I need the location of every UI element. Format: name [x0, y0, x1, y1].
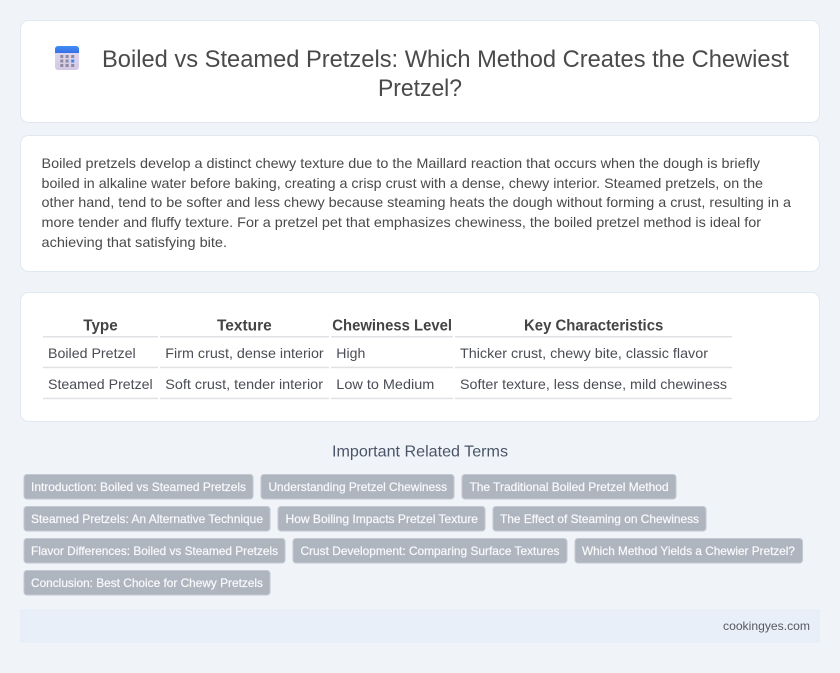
- tag: effect of steaming: The Effect of Steaming on Chewiness: [500, 512, 699, 526]
- tag: flavor differences: [24, 538, 285, 563]
- table row: boiled pretzel: Thicker crust, chewy bite, classic flavor: [460, 345, 708, 361]
- tag: traditional method: [462, 474, 676, 499]
- text block: introduction: more tender and fluffy texture. For a pretzel pet that emphasizes chewiness, the boiled pretzel method is ideal for: [42, 214, 761, 230]
- table header row: Chewiness Level: [332, 318, 452, 334]
- tag: understanding chewiness: [261, 474, 454, 499]
- icon: calendar: [55, 46, 79, 70]
- tag: introduction: [24, 474, 253, 499]
- table header row: Type: [83, 318, 118, 334]
- text block: introduction: boiled in alkaline water before baking, creating a crisp crust with a dense, chewy interior. Steamed pretzels, on the: [42, 175, 763, 191]
- panel: comparison table: [20, 292, 820, 422]
- tag: crust development: Crust Development: Comparing Surface Textures: [300, 544, 560, 558]
- table row: steamed pretzel: [48, 376, 727, 392]
- footer: cookingyes.com: [723, 619, 810, 633]
- tag: crust development: [293, 538, 567, 563]
- table row: steamed pretzel: Low to Medium: [336, 376, 434, 392]
- text block: introduction: [42, 155, 791, 250]
- tag: traditional method: The Traditional Boiled Pretzel Method: [470, 480, 668, 494]
- heading: related terms: Important Related Terms: [332, 444, 508, 460]
- tag group: related terms: [24, 474, 802, 595]
- tag: how boiling impacts: How Boiling Impacts Pretzel Texture: [286, 512, 478, 526]
- table row: boiled pretzel: High: [336, 345, 365, 361]
- tag: steamed pretzels: [24, 506, 270, 531]
- title: Pretzel?: [378, 75, 462, 102]
- panel: title header: [20, 20, 820, 122]
- tag: which method: [575, 538, 802, 563]
- tag: flavor differences: Flavor Differences: Boiled vs Steamed Pretzels: [31, 544, 278, 558]
- panel: introduction text: [20, 136, 820, 272]
- tag: conclusion: Conclusion: Best Choice for Chewy Pretzels: [31, 576, 263, 590]
- text block: introduction: achieving that satisfying bite.: [42, 234, 227, 250]
- table header row: [83, 318, 663, 334]
- table row: steamed pretzel: Softer texture, less dense, mild chewiness: [460, 376, 727, 392]
- tag: which method: Which Method Yields a Chewier Pretzel?: [582, 544, 795, 558]
- table row: boiled pretzel: Firm crust, dense interior: [165, 345, 324, 361]
- tag: understanding chewiness: Understanding Pretzel Chewiness: [268, 480, 447, 494]
- title: Boiled vs Steamed Pretzels: Which Method Creates the Chewiest: [102, 46, 789, 73]
- table row: boiled pretzel: [48, 345, 708, 361]
- tag: introduction: Introduction: Boiled vs Steamed Pretzels: [31, 480, 246, 494]
- text block: introduction: Boiled pretzels develop a distinct chewy texture due to the Maillard reaction that occurs when the dough is briefly: [42, 155, 760, 171]
- title: [102, 46, 789, 102]
- table header row: Texture: [217, 318, 272, 334]
- table row: steamed pretzel: Steamed Pretzel: [48, 376, 153, 392]
- table row: boiled pretzel: Boiled Pretzel: [48, 345, 136, 361]
- tag: steamed pretzels: Steamed Pretzels: An Alternative Technique: [31, 512, 263, 526]
- tag: how boiling impacts: [278, 506, 485, 531]
- tag: conclusion: [24, 570, 270, 595]
- text block: introduction: other hand, tend to be softer and less chewy because steaming heats the dough without forming a crust, resulting in a: [42, 194, 791, 210]
- table header row: Key Characteristics: [524, 318, 663, 334]
- table row: steamed pretzel: Soft crust, tender interior: [165, 376, 323, 392]
- tag: effect of steaming: [493, 506, 706, 531]
- footer: [20, 609, 820, 643]
